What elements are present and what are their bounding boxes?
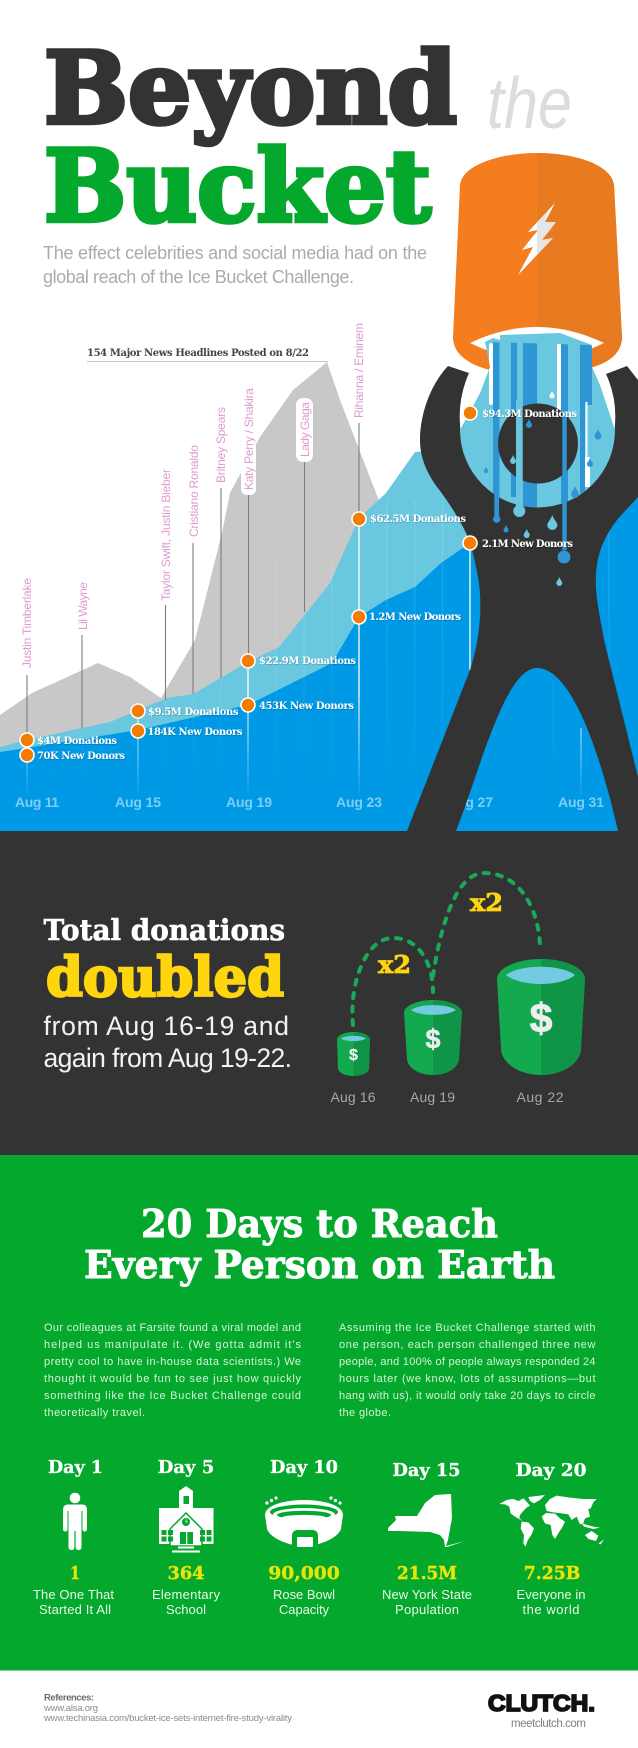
footer: Clutch logo: CLUTCH. — [488, 1690, 595, 1716]
heading: Every Person on Earth — [84, 1242, 555, 1287]
text: right column: one person, each person challenged three new — [339, 1339, 596, 1351]
column: day 20: Everyone in — [516, 1587, 586, 1602]
celebrity annotations: Cristiano Ronaldo — [187, 445, 201, 537]
data markers and labels: $22.9M Donations — [259, 656, 356, 667]
column: day 15: 21.5M — [397, 1563, 457, 1584]
text: left column: helped us manipulate it. (We gotta admit it's — [44, 1339, 302, 1351]
blue area: new donors — [0, 470, 638, 831]
column: day 20: the world — [522, 1602, 580, 1617]
title: the — [487, 64, 572, 144]
data markers and labels: $94.3M Donations — [482, 409, 577, 420]
bucket date labels: Aug 16 — [330, 1089, 376, 1105]
water pouring from bucket — [460, 330, 615, 586]
multiplier labels — [378, 888, 503, 979]
title: Beyond — [44, 31, 457, 147]
text: left column — [44, 1322, 302, 1419]
text: right column: hours later (we know, lots of assumptions—but — [339, 1373, 596, 1385]
grey area: news headlines — [0, 362, 400, 780]
heading — [84, 1201, 555, 1287]
celebrity annotations: Lil Wayne — [76, 582, 90, 630]
column: day 5: School — [166, 1602, 206, 1617]
column: day 1: 1 — [70, 1563, 80, 1584]
text: left column: pretty cool to have in-house data scientists.) We — [44, 1356, 301, 1368]
icon: school — [159, 1486, 214, 1552]
title: Bucket — [44, 129, 431, 245]
bucket date labels: Aug 22 — [516, 1089, 564, 1105]
subtitle — [43, 243, 427, 287]
column: day 20: Day 20 — [516, 1460, 586, 1481]
axis date labels: Aug 15 — [115, 794, 161, 810]
text: left column: theoretically travel. — [44, 1407, 145, 1419]
bucket date labels: Aug 19 — [410, 1089, 455, 1105]
footer: references — [43, 1692, 292, 1724]
icon: small bucket — [337, 1032, 370, 1076]
headline peak annotation: 154 Major News Headlines Posted on 8/22 — [87, 348, 309, 359]
icon: person — [63, 1493, 87, 1550]
celebrity annotations: Rihanna / Eminem — [352, 323, 366, 418]
bucket date labels — [330, 1089, 564, 1105]
multiplier labels: x2 — [378, 950, 411, 979]
column: day 20 — [499, 1460, 604, 1617]
text: right column: Assuming the Ice Bucket Challenge started with — [339, 1322, 596, 1334]
icon: small bucket: $ — [349, 1047, 358, 1064]
column: day 15 — [382, 1460, 472, 1617]
footer: Clutch logo: meetclutch.com — [511, 1718, 586, 1730]
footer: references: References: — [44, 1692, 94, 1704]
column: day 10: Day 10 — [270, 1457, 338, 1478]
celebrity annotations: Katy Perry / Shakira — [242, 388, 256, 490]
icon: lightning bolt — [518, 203, 556, 275]
column: day 15: Day 15 — [392, 1460, 460, 1481]
celebrity annotations: Justin Timberlake — [20, 578, 34, 668]
axis date labels: Aug 27 — [447, 794, 493, 810]
text: right column: the globe. — [339, 1407, 391, 1419]
column: day 10: 90,000 — [268, 1563, 340, 1584]
data markers and labels: $62.5M Donations — [370, 514, 466, 525]
column: day 15: New York State — [382, 1587, 472, 1602]
text: date ranges: again from Aug 19-22. — [44, 1043, 292, 1073]
subtitle: global reach of the Ice Bucket Challenge. — [43, 267, 354, 287]
vertical grid — [55, 500, 609, 800]
axis date labels: Aug 19 — [226, 794, 272, 810]
text: left column: something like the Ice Bucket Challenge could — [44, 1390, 301, 1402]
light blue area: donations — [0, 450, 475, 831]
data markers and labels: 184K New Donors — [148, 727, 243, 738]
footer: Clutch logo — [488, 1690, 595, 1730]
bucket rim opening — [470, 327, 604, 360]
data markers and labels: $9.5M Donations — [148, 707, 239, 718]
head — [498, 404, 578, 484]
column: day 1 — [33, 1457, 114, 1617]
celebrity annotations: Lady Gaga — [298, 402, 312, 457]
icon: large bucket: $ — [530, 995, 553, 1041]
title — [44, 31, 572, 245]
data markers and labels: 453K New Donors — [259, 701, 354, 712]
orange bucket — [453, 153, 622, 376]
axis date labels: Aug 11 — [15, 794, 59, 810]
column: day 5 — [152, 1457, 220, 1617]
heading: total donations doubled: Total donations — [44, 913, 285, 947]
column: day 15: Population — [395, 1602, 459, 1617]
heading: total donations doubled: doubled — [46, 945, 284, 1009]
data markers and labels: 1.2M New Donors — [369, 612, 461, 623]
column: day 10: Rose Bowl — [273, 1587, 335, 1602]
axis date labels — [15, 794, 604, 810]
area chart: news headlines, donations and new donors — [0, 362, 638, 831]
heading: 20 Days to Reach — [141, 1201, 498, 1246]
column: day 1: The One That — [33, 1587, 114, 1602]
subtitle: The effect celebrities and social media had on the — [43, 243, 427, 263]
water drips — [484, 391, 602, 586]
white marker stems — [27, 413, 581, 795]
text: date ranges: from Aug 16-19 and — [44, 1011, 289, 1041]
data markers and labels — [20, 406, 577, 762]
icon: large bucket — [497, 959, 585, 1075]
celebrity annotations: Taylor Swift, Justin Bieber — [159, 469, 173, 601]
arrow: doubling arcs — [352, 873, 540, 1025]
panel: 20 days to reach everyone — [0, 1155, 638, 1670]
heading: total donations doubled — [44, 913, 285, 1009]
text: right column: people, and 100% of people always responded 24 — [339, 1356, 596, 1368]
icon: medium bucket — [404, 1000, 462, 1075]
axis date labels: Aug 31 — [558, 794, 604, 810]
celebrity annotations: Britney Spears — [214, 407, 228, 483]
text: right column: hang with us), it would only take 20 days to circle — [339, 1390, 596, 1402]
column: day 5: Day 5 — [158, 1457, 214, 1478]
text: left column: Our colleagues at Farsite found a viral model and — [44, 1322, 301, 1334]
column: day 1: Day 1 — [48, 1457, 103, 1478]
data markers and labels: $4M Donations — [37, 736, 117, 747]
column: day 5: 364 — [168, 1563, 204, 1584]
column: day 1: Started It All — [39, 1602, 111, 1617]
text: right column — [339, 1322, 596, 1419]
data markers and labels: 2.1M New Donors — [482, 539, 573, 550]
multiplier labels: x2 — [470, 888, 503, 917]
icon: medium bucket: $ — [425, 1024, 441, 1054]
footer: references: www.techinasia.com/bucket-ice-sets-internet-fire-study-virality — [43, 1713, 292, 1724]
axis date labels: Aug 23 — [336, 794, 382, 810]
icon: New York State — [388, 1494, 465, 1547]
column: day 20: 7.25B — [524, 1563, 580, 1584]
footer: references: www.alsa.org — [43, 1703, 98, 1714]
icon: world map — [499, 1495, 604, 1547]
data markers and labels: 70K New Donors — [37, 751, 125, 762]
column: day 10: Capacity — [279, 1602, 330, 1617]
column: day 5: Elementary — [152, 1587, 220, 1602]
text: left column: thought it would be fun to see just how quickly — [44, 1373, 302, 1385]
celebrity annotations — [20, 323, 366, 740]
panel: donations doubled — [0, 831, 638, 1155]
column: day 10 — [265, 1457, 343, 1617]
figure silhouette — [407, 366, 638, 831]
text: date ranges — [44, 1011, 292, 1073]
icon: stadium — [265, 1496, 343, 1547]
